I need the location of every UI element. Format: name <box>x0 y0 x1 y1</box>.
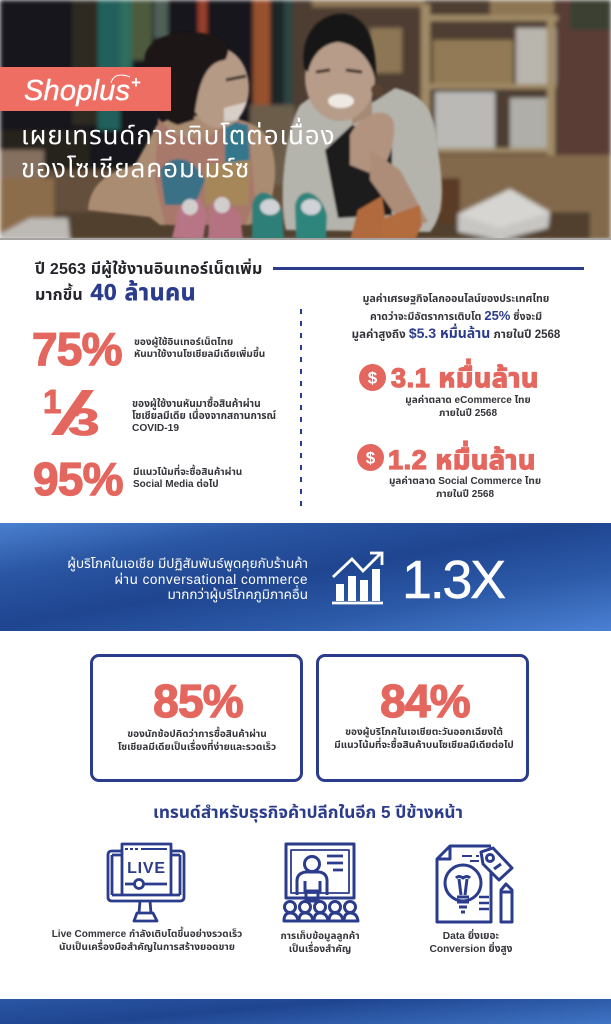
thai online economy text: มูลค่าสูงถึง $5.3 หมื่นล้าน ภายในปี 2568 <box>352 325 560 341</box>
thai online economy text: คาดว่าจะมีอัตราการเติบโต 25% ซึ่งจะมี <box>370 308 542 322</box>
ecommerce market description: มูลค่าตลาด eCommerce ไทย <box>405 395 531 406</box>
hero title <box>21 118 335 183</box>
logo plus sign: + <box>131 73 141 92</box>
icon: audience and presenter <box>282 842 360 922</box>
stat: 75%: 75% <box>32 323 122 375</box>
card description <box>118 726 276 752</box>
banner text <box>67 556 308 602</box>
stat one third description: COVID-19 <box>132 423 179 434</box>
stat: one third: 3 <box>68 401 100 444</box>
stat: 95%: 95% <box>33 453 123 505</box>
card description <box>334 726 514 750</box>
icon: dollar coin <box>357 444 384 471</box>
icon: dollar coin: $ <box>368 368 378 388</box>
hero photo: two women laughing over shoes in a shop <box>0 0 611 240</box>
right woman <box>283 88 442 232</box>
social commerce market description <box>389 476 541 500</box>
icon: document with light bulb <box>436 844 514 924</box>
logo text: Shoplus <box>24 75 130 107</box>
icon: dollar coin <box>359 364 386 391</box>
blue banner <box>0 523 611 631</box>
customer data description: การเก็บข้อมูลลูกค้า <box>280 931 360 942</box>
section heading: retail trends: เทรนด์สำหรับธุรกิจค้าปลีกในอีก 5 ปีข้างหน้า <box>153 802 463 822</box>
social commerce market description: มูลค่าตลาด Social Commerce ไทย <box>389 476 541 487</box>
thai online economy text: มูลค่าเศรษฐกิจโลกออนไลน์ของประเทศไทย <box>363 293 549 305</box>
thai online economy text <box>352 293 560 341</box>
stat one third description <box>132 396 276 434</box>
icon: growth chart <box>332 552 384 604</box>
banner text: มากกว่าผู้บริโภคภูมิภาคอื่น <box>167 587 308 602</box>
live commerce description <box>52 926 242 952</box>
heading rule <box>273 267 584 270</box>
stat 75% description: หันมาใช้งานโซเชียลมีเดียเพิ่มขึ้น <box>134 349 265 360</box>
icon: dollar coin: $ <box>366 448 376 468</box>
card description: มีแนวโน้มที่จะซื้อสินค้าบนโซเชียลมีเดียต่อไป <box>334 740 514 750</box>
card: 84% <box>316 654 529 782</box>
stat one third description: โซเชียลมีเดีย เนื่องจากสถานการณ์ <box>132 411 276 422</box>
live commerce description: Live Commerce กำลังเติบโตขึ้นอย่างรวดเร็ว <box>52 929 242 940</box>
ecommerce market description <box>405 394 531 418</box>
banner text: ผู้บริโภคในเอเชีย มีปฏิสัมพันธ์พูดคุยกับร้านค้า <box>67 556 308 571</box>
logo arc <box>110 74 130 84</box>
banner text: ผ่าน conversational commerce <box>114 572 308 586</box>
hero title: เผยเทรนด์การเติบโตต่อเนื่อง <box>21 120 335 150</box>
data conversion description: Conversion ยิ่งสูง <box>430 944 512 954</box>
card value: 84% <box>380 675 470 727</box>
stat 75% description <box>134 336 265 360</box>
stat 75% description: ของผู้ใช้อินเทอร์เน็ตไทย <box>134 337 233 348</box>
icon: live commerce monitor: LIVE <box>127 860 166 877</box>
stat: one third <box>43 383 100 444</box>
customer data description: เป็นเรื่องสำคัญ <box>289 944 351 954</box>
card value: 85% <box>153 675 243 727</box>
card description: ของนักช้อปคิดว่าการซื้อสินค้าผ่าน <box>127 729 267 740</box>
section heading: internet users: ปี 2563 มีผู้ใช้งานอินเทอร์เน็ตเพิ่ม <box>35 261 262 278</box>
social commerce market description: ภายในปี 2568 <box>436 488 494 500</box>
stat 95% description: มีแนวโน้มที่จะซื้อสินค้าผ่าน <box>133 467 242 478</box>
dashed column divider <box>300 309 302 506</box>
value: 1.3X: 1.3X <box>402 550 504 610</box>
logo banner: Shoplus+ <box>0 67 171 111</box>
card description: โซเชียลมีเดียเป็นเรื่องที่ง่ายและรวดเร็ว <box>118 742 276 752</box>
data conversion description: Data ยิ่งเยอะ <box>443 931 499 942</box>
value: social commerce market: 1.2 หมื่นล้าน <box>388 445 536 475</box>
stat one third description: ของผู้ใช้งานหันมาซื้อสินค้าผ่าน <box>132 399 261 410</box>
value: ecommerce market: 3.1 หมื่นล้าน <box>391 363 539 393</box>
hero title: ของโซเชียลคอมเมิร์ซ <box>21 153 250 183</box>
left woman <box>88 116 275 225</box>
customer data description <box>280 930 360 954</box>
ecommerce market description: ภายในปี 2568 <box>439 408 497 418</box>
section heading: internet users: มากขึ้น 40 ล้านคน <box>35 279 196 305</box>
card: 85% <box>90 654 303 782</box>
data conversion description <box>430 928 512 955</box>
icon: live commerce monitor <box>106 842 186 922</box>
section heading: internet users <box>34 258 262 305</box>
stat 95% description <box>133 464 242 490</box>
bottom blue band <box>0 999 611 1024</box>
stat: one third: 1 <box>43 383 61 420</box>
live commerce description: นับเป็นเครื่องมือสำคัญในการสร้างยอดขาย <box>59 942 235 952</box>
stat 95% description: Social Media ต่อไป <box>133 479 219 490</box>
card description: ของผู้บริโภคในเอเชียตะวันออกเฉียงใต้ <box>345 727 503 738</box>
shoes <box>172 198 207 240</box>
